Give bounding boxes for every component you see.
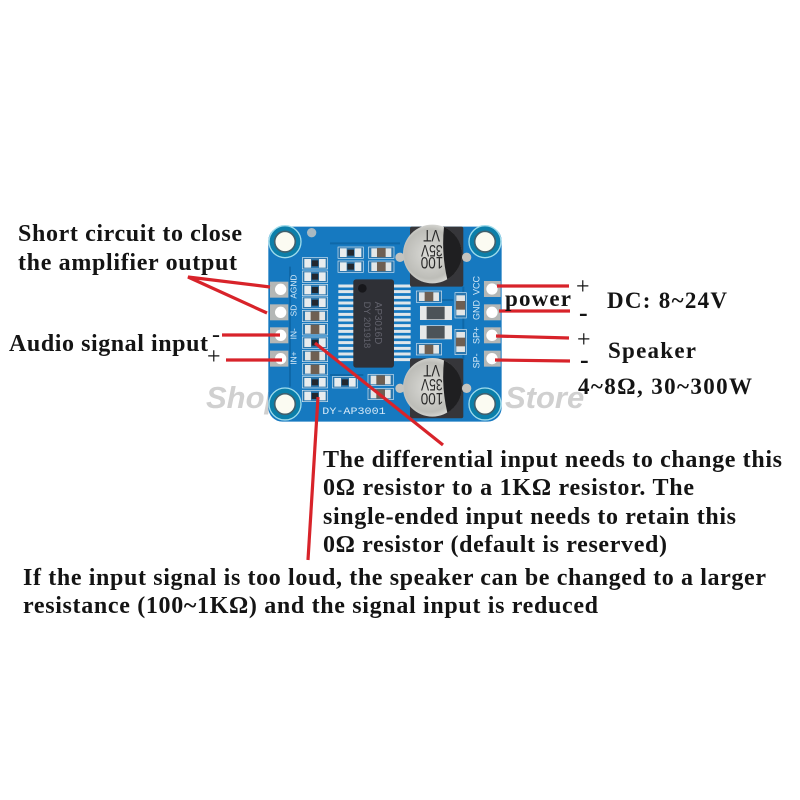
speaker polarity signs: + xyxy=(577,327,591,353)
power polarity signs: + xyxy=(576,274,590,300)
pin labels right: SP+ xyxy=(471,327,481,344)
resistor column xyxy=(302,258,358,402)
callout: short circuit: the amplifier output xyxy=(18,250,237,276)
pin labels left: AGND xyxy=(289,275,299,299)
callout: short circuit: Short circuit to close xyxy=(18,221,242,247)
arrow: differential resistor xyxy=(315,343,443,445)
amplifier chip pins xyxy=(338,286,411,360)
circuit board photo xyxy=(268,225,502,422)
note: loud input: resistance (100~1KΩ) and the signal input is reduced xyxy=(23,593,599,619)
top components xyxy=(338,247,394,272)
bottom capacitor: VT xyxy=(423,361,440,380)
pin labels left: IN+ xyxy=(289,351,299,365)
top capacitor: VT xyxy=(423,226,440,245)
amplifier chip: AP3016D xyxy=(372,302,383,344)
board model label: DY-AP3001 xyxy=(322,406,386,418)
board body xyxy=(268,227,502,422)
note: differential input: The differential input needs to change this xyxy=(323,447,782,473)
callout: short circuit xyxy=(18,221,242,276)
note: differential input xyxy=(323,447,782,558)
note: loud input xyxy=(23,565,766,619)
speaker polarity signs xyxy=(577,327,591,374)
pin labels left xyxy=(289,275,299,365)
note: differential input: 0Ω resistor (default is reserved) xyxy=(323,532,667,558)
bottom capacitor: 100 xyxy=(421,389,443,408)
bottom components xyxy=(368,374,393,400)
label: DC voltage: DC: 8~24V xyxy=(607,288,727,313)
watermark: Shop xyxy=(206,380,284,415)
note: differential input: single-ended input needs to retain this xyxy=(323,504,736,530)
left header pads xyxy=(270,282,288,367)
label: speaker: Speaker xyxy=(608,338,696,363)
power polarity signs: - xyxy=(579,298,588,327)
right header pads xyxy=(484,281,501,367)
label: power: power xyxy=(505,286,571,311)
pin labels right: SP- xyxy=(471,353,481,368)
top capacitor: 35V xyxy=(420,241,443,260)
arrow: input resistor xyxy=(308,397,318,560)
top capacitor: 100 xyxy=(421,253,443,272)
speaker polarity signs: - xyxy=(580,345,589,374)
audio lines xyxy=(222,335,282,360)
watermark xyxy=(206,380,584,415)
note: differential input: 0Ω resistor to a 1KΩ resistor. The xyxy=(323,475,694,501)
watermark: Store xyxy=(505,380,584,415)
audio polarity signs xyxy=(207,322,221,370)
audio polarity signs: + xyxy=(207,344,221,370)
mounting holes xyxy=(269,226,501,420)
amplifier chip xyxy=(353,279,394,368)
pin labels left: SD xyxy=(289,305,299,316)
label: speaker specification: 4~8Ω, 30~300W xyxy=(578,374,752,399)
bottom capacitor xyxy=(395,358,471,418)
top capacitor xyxy=(395,225,471,287)
right components xyxy=(416,291,466,355)
audio polarity signs: - xyxy=(212,322,220,348)
arrows: short circuit xyxy=(188,277,270,313)
pin labels left: IN- xyxy=(289,328,299,339)
label: audio signal input: Audio signal input xyxy=(9,331,208,357)
power polarity signs xyxy=(576,274,590,327)
speaker lines xyxy=(495,336,570,361)
power lines xyxy=(497,286,570,311)
note: loud input: If the input signal is too loud, the speaker can be changed to a larger xyxy=(23,565,766,591)
pin labels right xyxy=(471,276,481,368)
pin labels right: VCC xyxy=(471,276,481,295)
bottom capacitor: 35V xyxy=(420,375,443,394)
pin labels right: GND xyxy=(471,300,481,320)
amplifier chip: DY 201918 xyxy=(362,302,372,348)
